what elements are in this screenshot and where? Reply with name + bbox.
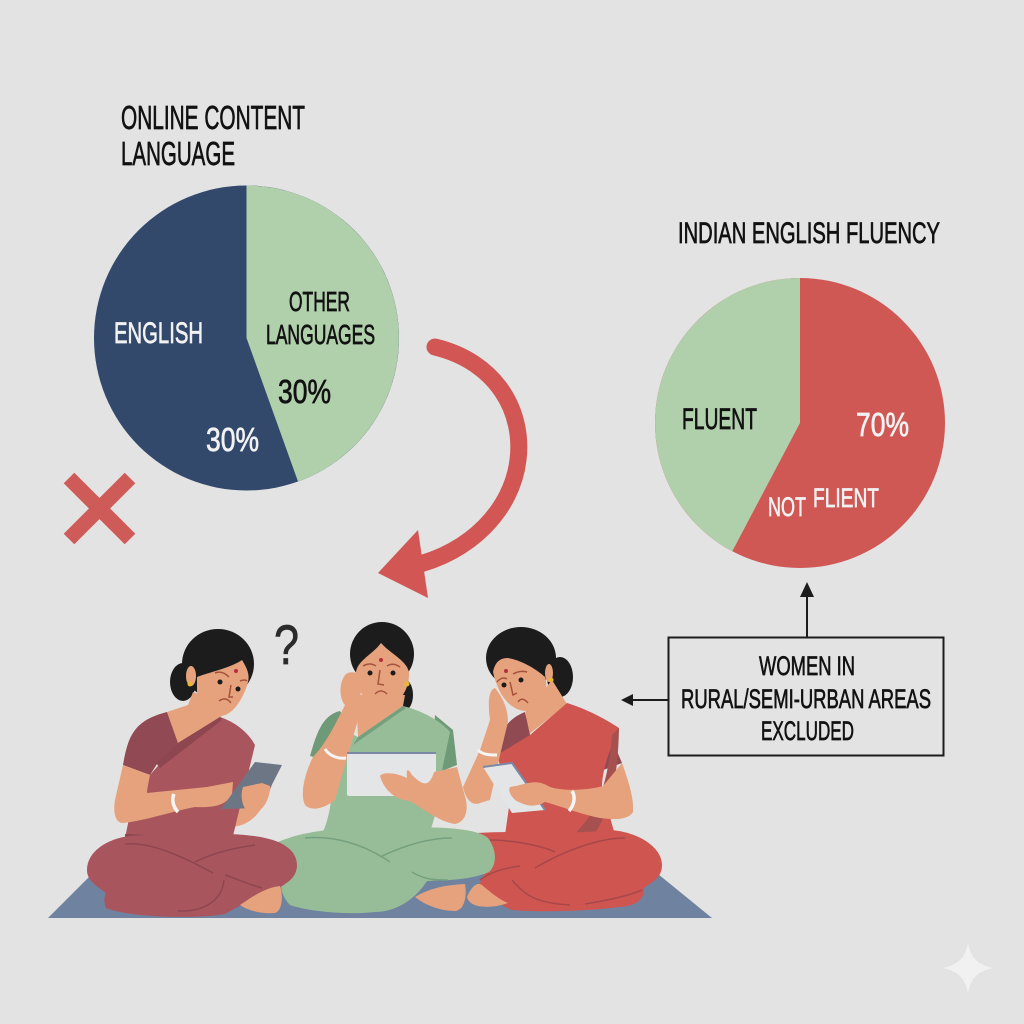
legs bbox=[277, 827, 495, 913]
tablet bbox=[221, 762, 282, 809]
bangle bbox=[569, 791, 574, 811]
right arm bbox=[509, 763, 633, 819]
pie chart: Indian English fluency: FLIENT bbox=[813, 483, 879, 513]
foot bbox=[240, 886, 282, 913]
leg creases bbox=[305, 837, 452, 880]
pie chart: online content language: 30% bbox=[206, 421, 259, 458]
arrow: curved red arrow bbox=[378, 347, 519, 598]
hair bun bbox=[170, 663, 196, 701]
figure: woman in green bbox=[277, 622, 495, 913]
mat bbox=[48, 874, 712, 918]
legs bbox=[477, 830, 662, 911]
face bbox=[356, 643, 409, 708]
blouse bbox=[497, 712, 622, 772]
ear bbox=[186, 666, 196, 686]
neck and chest bbox=[356, 695, 405, 737]
sari fold bbox=[156, 717, 222, 768]
right hand back arm bbox=[232, 780, 272, 827]
figure: woman in maroon bbox=[87, 629, 297, 917]
pie chart: online content language: ENGLISH bbox=[114, 317, 203, 350]
foot bbox=[415, 884, 466, 911]
title: online content language: LANGUAGE bbox=[121, 135, 235, 172]
foot bbox=[467, 884, 508, 907]
pie chart: Indian English fluency: NOT bbox=[768, 492, 806, 522]
hair bun bbox=[547, 657, 573, 697]
hair bbox=[182, 629, 254, 699]
bangle bbox=[325, 749, 346, 758]
sari torso bbox=[125, 717, 255, 847]
leg creases bbox=[125, 844, 262, 911]
callout: women excluded: WOMEN IN bbox=[759, 651, 855, 681]
face bbox=[493, 658, 546, 711]
pie chart: Indian English fluency: 70% bbox=[856, 406, 909, 443]
callout: women excluded bbox=[668, 638, 944, 756]
pie chart: online content language: OTHER bbox=[289, 286, 350, 317]
neck and chest bbox=[167, 692, 222, 743]
sari fold bbox=[565, 728, 619, 842]
title: online content language: ONLINE CONTENT bbox=[121, 99, 305, 136]
arrow: box to women bbox=[621, 694, 668, 706]
sari fold bbox=[353, 706, 406, 745]
sari torso bbox=[320, 706, 450, 838]
tablet edge bbox=[483, 763, 545, 810]
leg creases bbox=[480, 838, 642, 905]
hair bbox=[486, 627, 556, 689]
icon: sparkle bbox=[943, 943, 993, 993]
pie chart: online content language: LANGUAGES bbox=[266, 319, 375, 350]
neck and chest bbox=[525, 680, 567, 735]
sari torso bbox=[497, 703, 619, 835]
tablet bbox=[483, 763, 545, 813]
legs bbox=[87, 833, 297, 917]
blouse left bbox=[310, 711, 352, 760]
icon: question mark: ? bbox=[274, 613, 299, 676]
ear bbox=[545, 664, 553, 682]
face details bbox=[363, 658, 410, 694]
face details bbox=[497, 669, 554, 703]
figure: woman in red bbox=[463, 627, 662, 911]
icon: red cross bbox=[69, 478, 130, 539]
blouse right bbox=[432, 715, 457, 775]
tablet edge bbox=[347, 752, 436, 754]
pie chart: Indian English fluency bbox=[655, 278, 945, 568]
pie chart: Indian English fluency: FLUENT bbox=[682, 403, 757, 436]
left arm bbox=[463, 688, 508, 804]
tablet bbox=[347, 753, 436, 796]
pie chart: online content language bbox=[94, 186, 399, 490]
blouse bbox=[123, 712, 178, 775]
face bbox=[197, 660, 249, 716]
pie chart: online content language: 30% bbox=[278, 373, 331, 410]
arm bbox=[114, 765, 233, 823]
right arm bbox=[380, 767, 467, 824]
hand on tablet bbox=[242, 783, 270, 813]
callout: women excluded: EXCLUDED bbox=[761, 716, 854, 746]
bangle bbox=[173, 794, 178, 812]
title: online content language bbox=[121, 99, 305, 172]
bangle bbox=[478, 750, 497, 755]
hair bun bbox=[397, 680, 413, 710]
face details bbox=[188, 669, 247, 703]
arrow: box to fluency pie bbox=[800, 582, 814, 637]
hair bbox=[350, 622, 414, 686]
left arm bbox=[303, 672, 362, 809]
waist fold bbox=[125, 834, 233, 847]
